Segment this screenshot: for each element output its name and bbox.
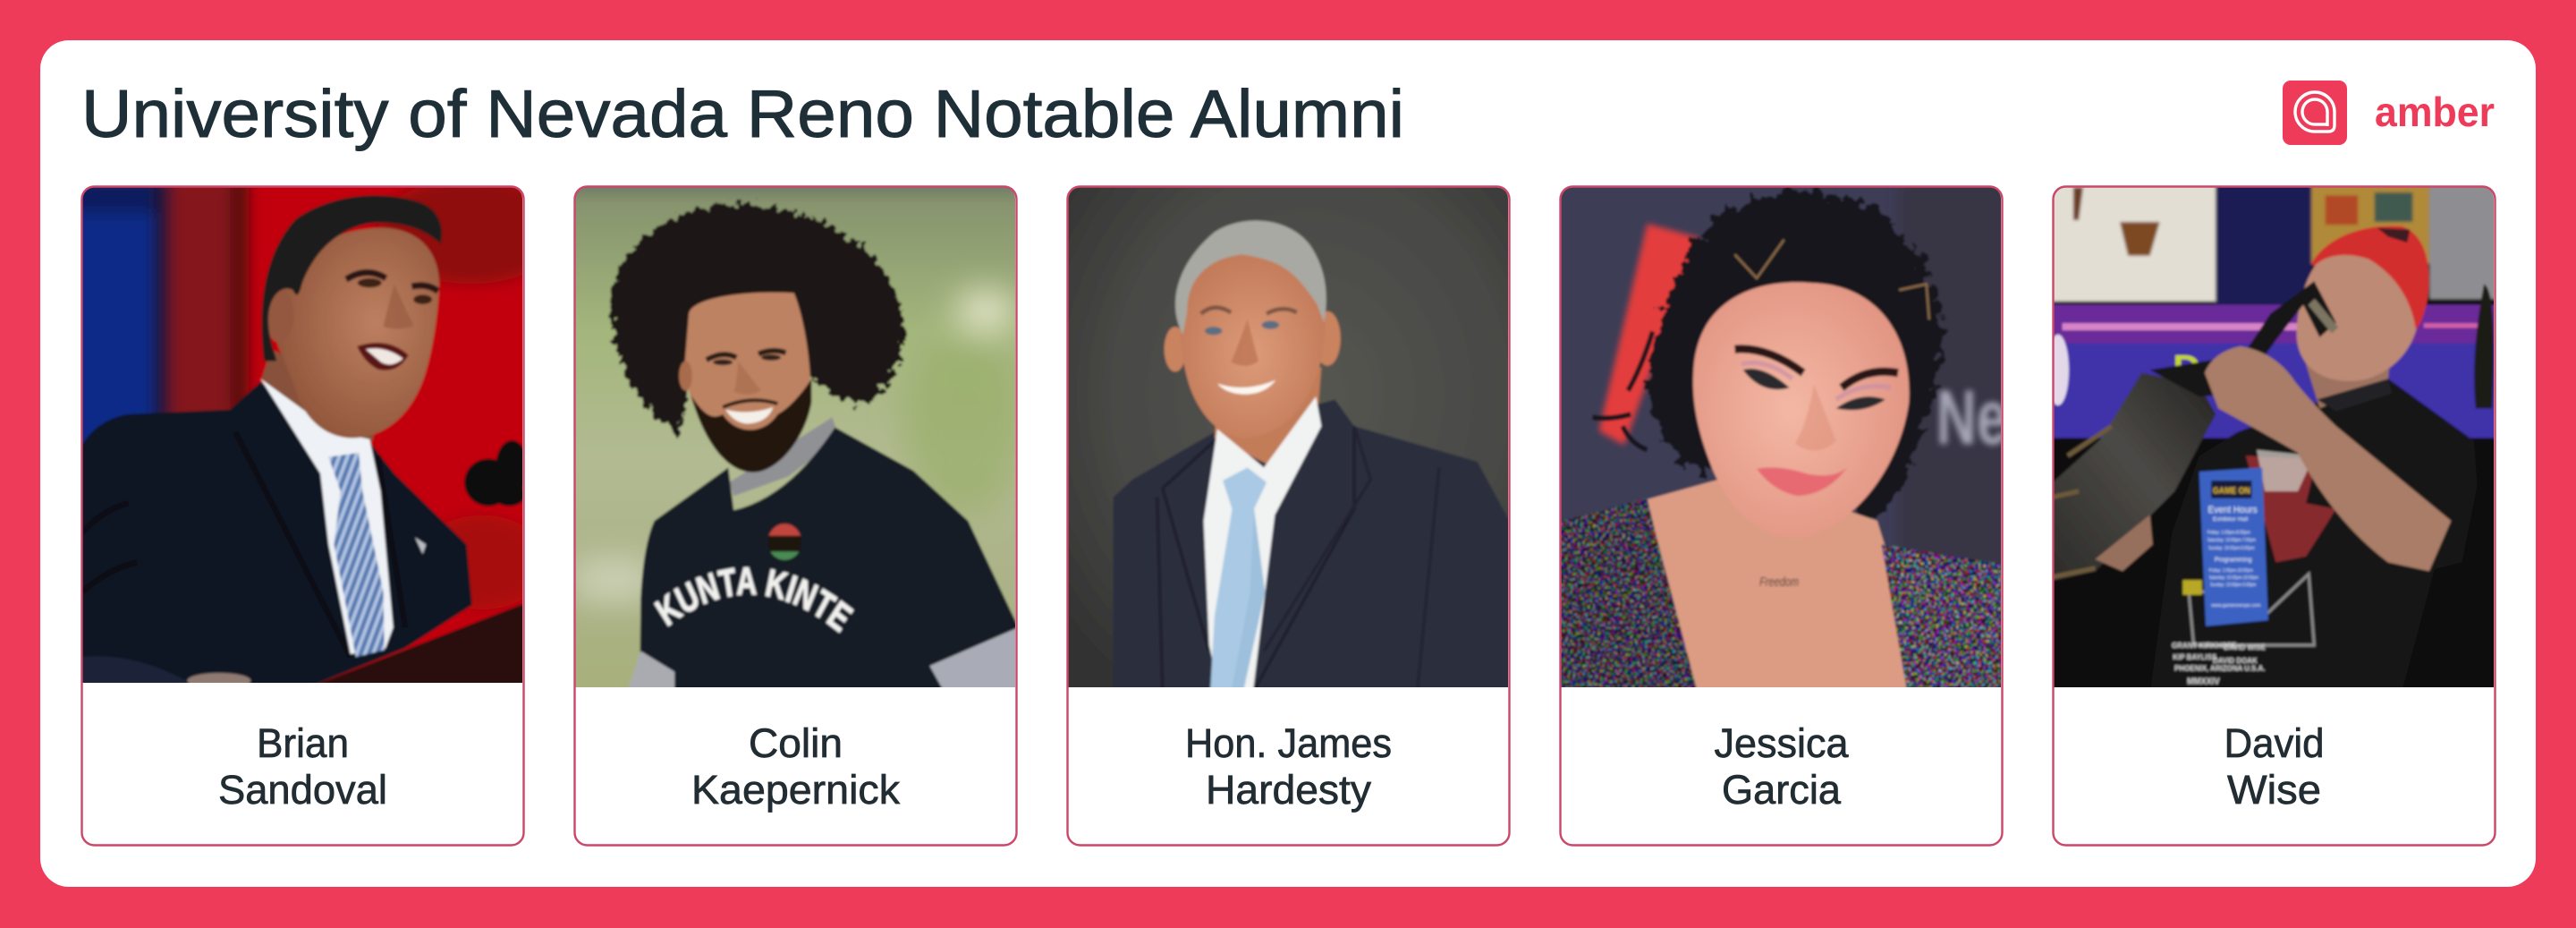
head: [683, 290, 812, 432]
beard: [691, 379, 811, 473]
tie: [1210, 468, 1267, 693]
photo: James Hardesty: [1058, 177, 1516, 693]
name: Jessica: [1714, 720, 1849, 766]
neck and chest: [1645, 473, 1907, 693]
microphone: [464, 440, 529, 506]
name: Sandoval: [218, 767, 387, 813]
name: David: [2224, 720, 2324, 766]
card: Brian Sandoval: [80, 185, 525, 847]
podium: [313, 603, 522, 683]
card: Hon. James Hardesty: [1058, 177, 1516, 845]
grey undershirt collar: [729, 417, 839, 496]
lanyard badge: Programming: [2215, 557, 2252, 564]
shirt text: KUNTA KINTE: [652, 565, 856, 635]
lanyard badge: [2199, 468, 2268, 626]
tie: [328, 453, 385, 657]
head: [271, 228, 439, 438]
name: Hon. James: [1185, 720, 1392, 766]
dress: [1551, 498, 2009, 693]
card border: [2054, 186, 2496, 845]
hand: [185, 670, 253, 683]
chest tattoo: Freedom: [1759, 574, 1799, 589]
lips: [1757, 467, 1847, 496]
shirt: [640, 428, 1019, 693]
name: Wise: [2227, 767, 2321, 813]
face: [1693, 282, 1909, 538]
name: [691, 720, 901, 813]
shirt: [2150, 379, 2478, 693]
lanyard badge: GAME ON: [2213, 486, 2250, 497]
head: [2297, 241, 2419, 381]
neck: [262, 349, 380, 450]
suit: [1114, 399, 1516, 693]
purple banner: [2043, 305, 2504, 438]
name: [1714, 720, 1849, 813]
backdrop posters: [2043, 177, 2504, 305]
logo: amber: [2283, 81, 2495, 145]
collar: [2317, 379, 2392, 412]
name: [2224, 720, 2324, 813]
photo: Colin Kaepernick: [576, 188, 1015, 687]
hair: [611, 204, 903, 435]
shirt: [1204, 396, 1321, 693]
raised arm and hand: [2205, 346, 2451, 571]
head: [1165, 327, 1186, 371]
title: University of Nevada Reno Notable Alumni: [81, 76, 1404, 151]
name: Colin: [749, 720, 843, 766]
suit: [77, 382, 472, 693]
card border: [1068, 186, 1510, 845]
lanyard badge: Friday: 1:00pm-8:00pm: [2207, 530, 2250, 536]
photo: David Wise: [2043, 177, 2504, 693]
saxophone: [2043, 281, 2336, 583]
shirt print: KIP BAYLISS: [2173, 653, 2217, 661]
shirt print: DAVID DOAK: [2213, 657, 2258, 665]
logo wordmark: amber: [2375, 89, 2495, 135]
name: [218, 720, 387, 813]
photo: David Wise: U: [2128, 396, 2141, 419]
name: Kaepernick: [691, 767, 901, 813]
lanyard badge: Saturday: 10:00pm-10:00pm: [2209, 575, 2258, 581]
name: [1185, 720, 1392, 813]
hair pins: [1735, 240, 1929, 319]
card: David Wise: [2043, 177, 2504, 845]
lanyard badge: Friday: 1:00pm-10:00pm: [2209, 568, 2253, 574]
pin badge: [767, 524, 801, 561]
photo: Brian Sandoval: [82, 188, 522, 683]
brows and eyes: [1735, 349, 1898, 387]
logo icon: [2283, 81, 2347, 145]
card border: [574, 186, 1016, 845]
sleeves: [627, 651, 674, 693]
lapel pin: [415, 538, 426, 554]
shirt print: PHOENIX, ARIZONA U.S.A.: [2174, 664, 2266, 672]
lanyard badge: Sunday: 10:00pm-5:00pm: [2208, 546, 2255, 551]
name: Brian: [257, 720, 349, 766]
lanyard badge: Saturday: 10:00pm-7:00pm: [2207, 538, 2256, 543]
shirt print: [2172, 450, 2336, 687]
name: Garcia: [1722, 767, 1842, 813]
name: Hardesty: [1206, 767, 1372, 813]
red cap: [2311, 226, 2429, 328]
shirt print: MMXXIV: [2187, 677, 2220, 687]
backdrop lettering: Ne: [1936, 374, 2007, 461]
lanyard badge: www.gameonexpo.com: [2211, 603, 2260, 609]
lanyard badge: Exhibitor Hall: [2213, 516, 2248, 523]
hair: [1175, 221, 1326, 335]
photo: Jessica Garcia: [1551, 177, 2020, 693]
card border: [1560, 186, 2002, 845]
lower hand: [2095, 515, 2153, 571]
card border: [82, 186, 524, 845]
hair: [1592, 192, 1943, 527]
shirt print: DAVID WISE: [2224, 643, 2266, 651]
neck: [1215, 367, 1321, 473]
shirt: [260, 379, 394, 654]
card: Colin Kaepernick: [573, 185, 1018, 847]
shirt print: GRANT KIRKHOPE: [2172, 642, 2237, 650]
neck: [2303, 349, 2391, 408]
red logo backdrop: [1599, 224, 1699, 445]
lanyard badge: Sunday: 10:00pm-5:00pm: [2210, 583, 2256, 588]
card: Jessica Garcia: [1551, 177, 2020, 845]
lanyard badge: Event Hours: [2208, 505, 2258, 515]
banner lettering: D: [2173, 348, 2200, 388]
